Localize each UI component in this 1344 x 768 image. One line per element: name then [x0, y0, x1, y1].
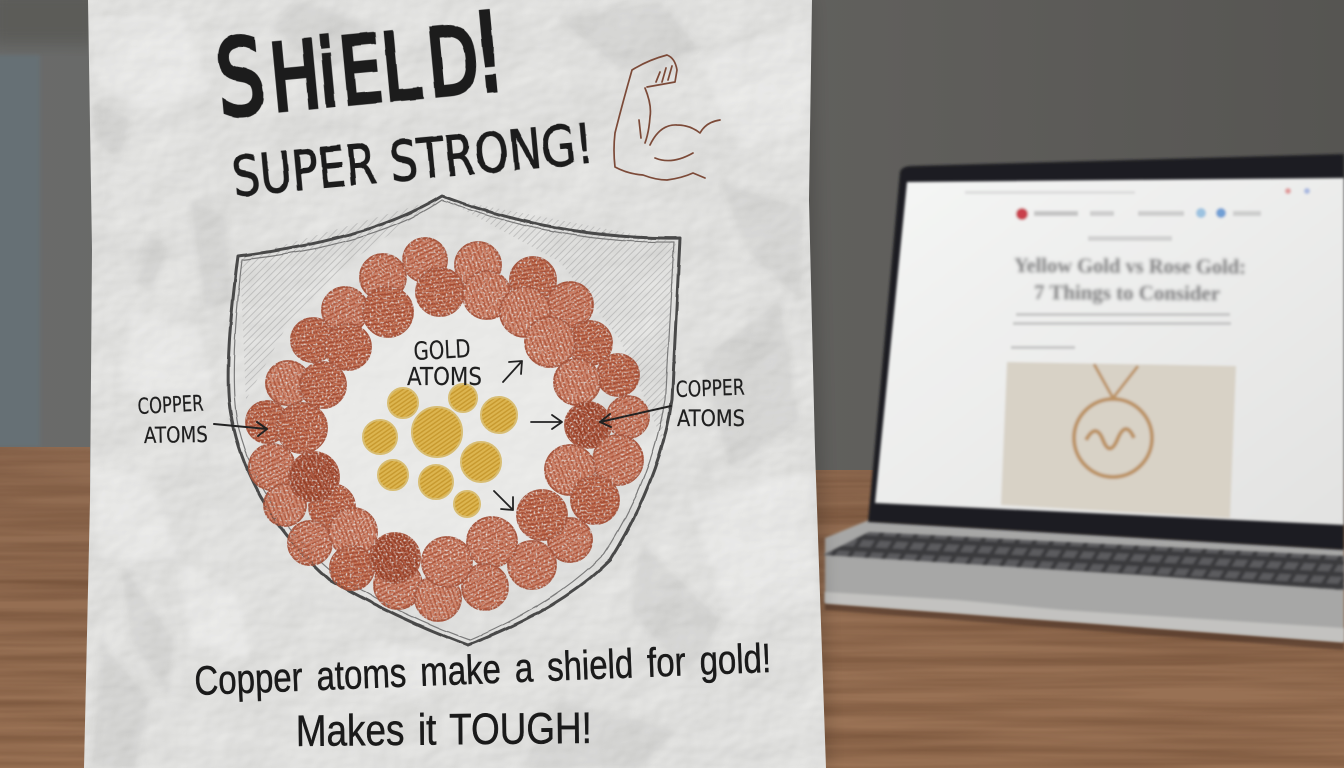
- table shadow under laptop: [825, 603, 1344, 650]
- laptop screen: [875, 178, 1344, 525]
- subtitle: SUPER STRONG!: [229, 112, 596, 209]
- label: copper atoms right: [675, 376, 745, 432]
- label: copper atoms right: COPPER: [675, 376, 745, 403]
- browser bar dots: [965, 188, 1310, 220]
- label: copper atoms left: COPPER: [137, 392, 204, 420]
- label: copper atoms left: ATOMS: [144, 423, 208, 449]
- copper atoms ring: [246, 238, 649, 621]
- paper shadow: [760, 0, 830, 768]
- title: S: [211, 17, 270, 141]
- shield outline: [228, 196, 680, 645]
- label: copper atoms right: ATOMS: [677, 407, 745, 432]
- shield center highlight: [305, 285, 585, 565]
- article title: Yellow Gold vs Rose Gold:: [1014, 253, 1246, 279]
- gold atoms: [363, 384, 517, 517]
- label: copper atoms left: [137, 392, 208, 449]
- left window pillar: [0, 55, 40, 447]
- laptop: [823, 154, 1344, 650]
- laptop front lip: [825, 592, 1344, 642]
- arrows from gold to copper: [494, 361, 562, 510]
- article title: [1014, 253, 1246, 305]
- shield hatching: [240, 198, 676, 440]
- title: H: [265, 22, 325, 133]
- caption: [194, 635, 772, 756]
- caption: Makes it TOUGH!: [296, 704, 592, 756]
- article title: 7 Things to Consider: [1034, 280, 1220, 305]
- caption: Copper atoms make a shield for gold!: [194, 635, 772, 704]
- background wall: [0, 0, 1344, 480]
- upper dark band, left: [0, 0, 100, 45]
- arrow: left copper label: [214, 422, 267, 436]
- article kicker: [1088, 236, 1172, 241]
- label: gold atoms: GOLD: [413, 334, 471, 366]
- laptop keyboard: [823, 532, 1344, 590]
- label: gold atoms: [407, 334, 482, 391]
- laptop lid: [868, 154, 1344, 550]
- arrow: right copper label: [600, 406, 671, 427]
- laptop base: [825, 520, 1344, 642]
- title: L: [377, 12, 424, 122]
- paper crease facets: [90, 0, 818, 768]
- title: i: [314, 20, 342, 128]
- icon: flexed arm: [614, 55, 720, 180]
- article image: necklace: [1001, 362, 1236, 518]
- shield diagram: [228, 196, 680, 645]
- title: E: [335, 16, 387, 126]
- article intro lines: [1011, 313, 1231, 349]
- label: gold atoms: ATOMS: [407, 362, 482, 391]
- wooden table: [0, 447, 1344, 768]
- title: D: [422, 7, 483, 118]
- crumpled paper sheet: [84, 0, 826, 768]
